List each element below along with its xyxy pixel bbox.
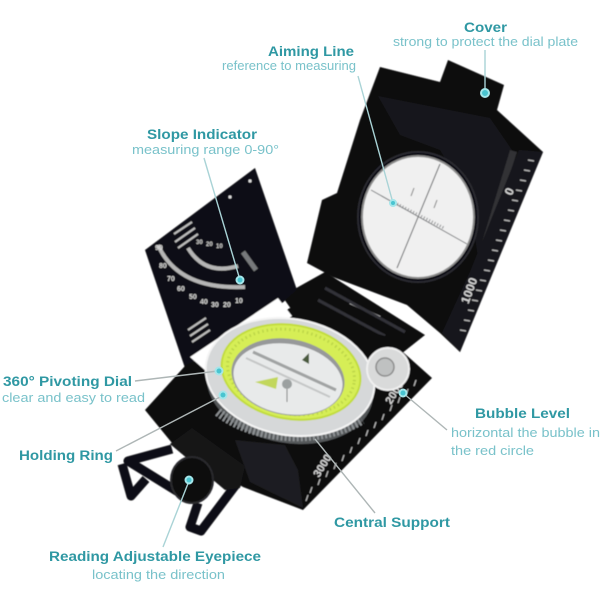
- label: cover: Cover: [464, 20, 508, 35]
- slope scale numbers: 30: [211, 302, 219, 309]
- label: bubble level: the red circle: [451, 444, 534, 458]
- label: aiming line: [222, 44, 396, 206]
- compass base: 3000: [311, 452, 335, 480]
- label: pivoting dial: 360° Pivoting Dial: [3, 374, 132, 389]
- label: eyepiece: [49, 476, 262, 582]
- compass illustration: [122, 60, 543, 531]
- slope scale numbers: 90: [155, 245, 163, 252]
- dial face: [228, 335, 348, 423]
- slope scale numbers: 10: [235, 298, 243, 305]
- luminous ring: [214, 314, 368, 430]
- slope scale numbers: 40: [200, 299, 208, 306]
- label: slope indicator: [132, 127, 279, 284]
- hinge highlight: [190, 298, 292, 372]
- sighting eyepiece: [122, 428, 245, 531]
- hinge: [282, 272, 425, 358]
- upper scale numbers: [196, 240, 223, 250]
- label: slope indicator: Slope Indicator: [147, 127, 258, 142]
- lens window: [358, 152, 478, 282]
- label: eyepiece: locating the direction: [92, 568, 225, 582]
- bubble level: [367, 348, 409, 390]
- label: eyepiece: Reading Adjustable Eyepiece: [49, 549, 262, 564]
- slope scale numbers: 50: [189, 294, 197, 301]
- label: slope indicator: measuring range 0-90°: [132, 143, 279, 157]
- slope scale numbers: 20: [223, 302, 231, 309]
- label: pivoting dial: clear and easy to read: [2, 391, 145, 405]
- slope scale numbers: 80: [159, 263, 167, 270]
- slope scale numbers: 60: [177, 286, 185, 293]
- base ruler: [306, 380, 416, 501]
- label: bubble level: [400, 390, 600, 458]
- label: cover: [393, 20, 578, 97]
- compass base: 2000: [383, 379, 407, 407]
- label: bubble level: horizontal the bubble in: [451, 426, 600, 440]
- lid ruler markings: [460, 160, 534, 331]
- label: bubble level: Bubble Level: [475, 406, 570, 421]
- compass lid: [307, 60, 543, 352]
- label: holding ring: Holding Ring: [19, 448, 113, 463]
- slope scale numbers: 70: [167, 276, 175, 283]
- dial: [196, 305, 384, 457]
- label: holding ring: [19, 392, 226, 463]
- label: cover: strong to protect the dial plate: [393, 35, 578, 49]
- compass base: [145, 298, 432, 510]
- upper scale numbers: 20: [206, 242, 213, 248]
- slope scale numbers: [155, 245, 243, 309]
- upper scale numbers: 10: [216, 244, 223, 250]
- compass lid: 0: [502, 185, 517, 197]
- label: aiming line: reference to measuring: [222, 59, 356, 73]
- label: central support: [315, 439, 451, 530]
- label: central support: Central Support: [334, 515, 451, 530]
- upper scale numbers: 30: [196, 240, 203, 246]
- compass lid: 1000: [458, 275, 480, 306]
- label: pivoting dial: [2, 368, 222, 405]
- clinometer plate: [145, 168, 297, 368]
- label: aiming line: Aiming Line: [268, 44, 355, 59]
